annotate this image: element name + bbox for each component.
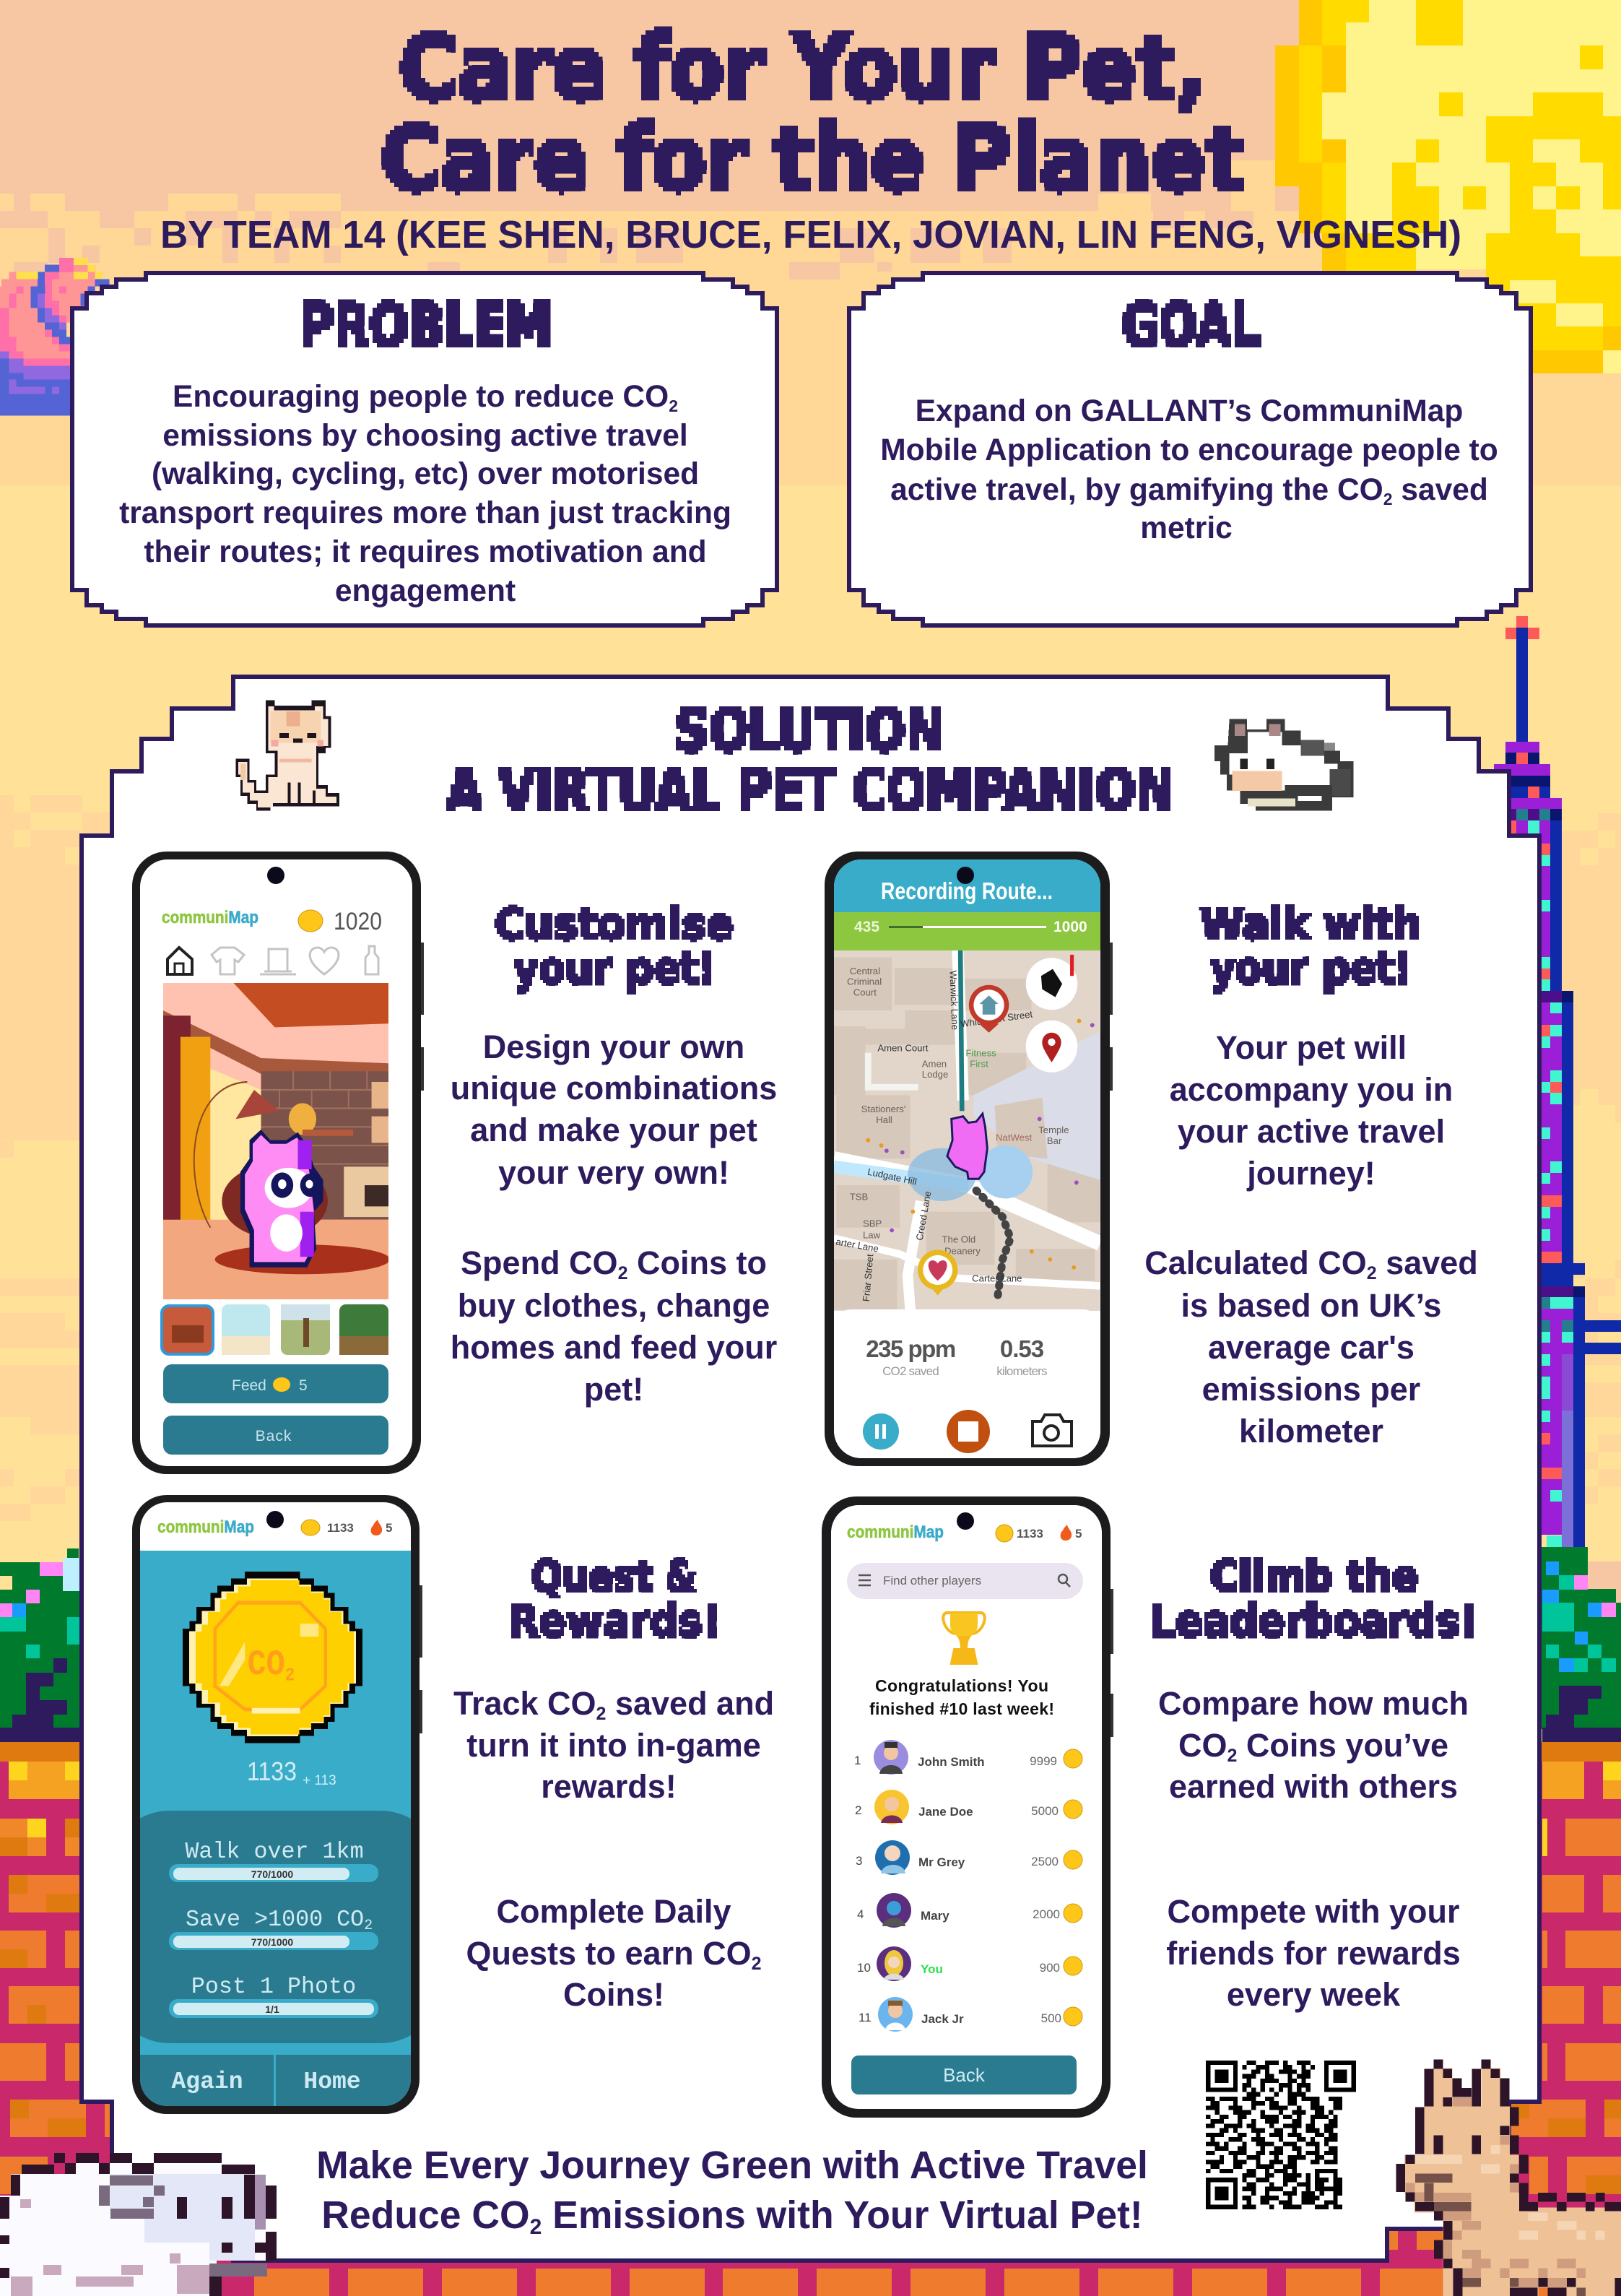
decoration: right hedge [1539,1547,1621,1742]
stats panel: CO2 saved [882,1364,939,1378]
map: Stationers' [861,1104,905,1114]
coin and streak [996,1525,1082,1542]
problem text: engagement [335,574,516,608]
heading: customise: Customise [495,899,734,950]
row 1 [854,1740,1082,1775]
row 1: 1 [854,1754,861,1767]
goal text: Expand on GALLANT’s CommuniMap [916,394,1463,428]
text: quests: 2 [752,1954,761,1974]
coin balance: 1020 [334,908,382,935]
home pin [969,985,1009,1033]
row 3 [856,1840,1082,1875]
problem text [119,380,731,608]
pixel CO2 coin: CO [248,1645,285,1685]
coin total: + 113 [303,1773,336,1788]
back button [163,1416,388,1455]
map: Law [863,1229,881,1240]
stop button [947,1410,990,1453]
sun [1275,0,1621,373]
bottom buttons: Home [303,2068,361,2095]
app bar: recording route: Recording Route... [881,878,1053,904]
progress bar 435/1000: 435 [854,919,879,935]
footer tagline: Make Every Journey Green with Active Travel [316,2144,1148,2187]
quest: photo: Post 1 Photo [191,1974,356,2000]
problem text: (walking, cycling, etc) over motorised [152,457,699,491]
pet [240,1130,323,1268]
quest: walk: Walk over 1km [185,1839,364,1865]
row 2: 2 [855,1803,861,1817]
icon: pixel sheep [0,2153,277,2296]
row 4: Mary [921,1909,949,1923]
back button: Back [256,1428,292,1444]
coin total: 1133 [247,1756,297,1786]
map [834,950,1100,1311]
map: Lodge [922,1069,948,1080]
phone: quests [108,1495,442,2114]
title: Care for the Planet [381,107,1244,212]
map: TSB [850,1192,868,1203]
footer tagline: Emissions with Your Virtual Pet! [542,2194,1143,2237]
text: quests: Complete Daily [496,1893,731,1930]
map: SBP [863,1218,882,1229]
quest panel [108,1811,442,2043]
heading: climb the leaderboards: Climb the [1210,1551,1418,1602]
stats panel [834,1309,1100,1461]
search bar: Find other players [883,1574,981,1587]
quest button [1026,955,1077,1010]
coin and streak: 1133 [327,1521,354,1535]
stats panel: 0.53 [1000,1335,1044,1362]
coin and streak [301,1520,392,1535]
communiMap logo: communiMap [847,1522,944,1542]
text: walk: Your pet will [1216,1029,1407,1066]
map: NatWest [996,1132,1032,1143]
panel: problem [72,273,777,625]
text: leaderboards: friends for rewards [1166,1935,1461,1972]
map: Carter Lane [972,1273,1022,1284]
text: leaderboards: 2 [1227,1746,1237,1766]
text: quests: rewards! [541,1768,677,1805]
decoration: brick ground [0,1742,1621,2296]
footer tagline: Reduce CO [321,2194,530,2237]
phone: route map [825,852,1113,1466]
row 11: 500 [1041,2011,1061,2025]
text: customise: unique combinations [451,1070,777,1106]
app bar: recording route [834,859,1100,912]
pixel CO2 coin [183,1572,362,1743]
heading: goal: GOAL [1122,292,1260,360]
text: quests [453,1685,774,2013]
heading: solution [446,697,1175,824]
location button [1026,1021,1077,1073]
row 2: Jane Doe [918,1805,973,1819]
map: White Hart Street [960,1008,1033,1029]
quest: photo [169,1974,378,2018]
goal text: metric [1140,511,1233,545]
row 4: 4 [857,1907,864,1921]
map: Criminal [847,976,882,987]
problem text: emissions by choosing active travel [162,419,688,453]
icon: pixel cow [1214,719,1353,810]
map: Warwick Lane [948,970,960,1030]
text: quests: turn it into in-game [466,1727,761,1764]
pixel CO2 coin: 2 [285,1665,295,1686]
decoration: left hedge [0,1548,79,1742]
map: Amen Court [877,1042,929,1053]
text: customise: homes and feed your [451,1329,777,1366]
heading: walk with your pet: Walk with [1200,899,1422,950]
map: arter Lane [835,1236,879,1255]
text: customise: pet! [584,1371,643,1408]
map: Fitness [965,1048,996,1059]
goal text: active travel, by gamifying the CO [890,473,1383,507]
goal text: 2 [1383,490,1393,508]
progress bar 435/1000: 1000 [1053,919,1087,935]
tab icons [168,946,378,974]
quest: photo: 1/1 [265,2003,279,2015]
phone: leaderboard [822,1496,1113,2118]
text: customise: your very own! [498,1154,729,1191]
home thumbnails [162,1304,388,1355]
text: quests: Track CO [453,1685,596,1722]
text: walk: accompany you in [1170,1071,1453,1108]
heading: solution: A VIRTUAL PET COMPANION [446,757,1175,824]
icon: pixel cat [235,701,339,810]
panel: solution [82,677,1539,2261]
row 2: 5000 [1031,1804,1059,1818]
goal text: Mobile Application to encourage people to [880,433,1498,467]
text: walk [1144,1029,1478,1450]
heart pin [918,1250,957,1296]
text: walk: average car's [1208,1329,1414,1366]
title [381,16,1244,212]
map: Bar [1047,1135,1062,1146]
problem text: their routes; it requires motivation and [144,535,707,569]
heading: walk with your pet: your pet! [1210,943,1412,994]
row 11: Jack Jr [921,2012,964,2026]
coin and streak: 5 [386,1521,392,1535]
map: First [970,1058,988,1069]
leaderboard rows [854,1740,1082,2032]
text: walk: saved [1377,1244,1478,1281]
text: leaderboards: CO [1178,1727,1227,1764]
quest: save CO2: 2 [364,1918,373,1934]
QR code [1206,2061,1356,2209]
heading: solution: SOLUTION [675,697,944,764]
stats panel: 235 ppm [866,1335,955,1362]
congratulations text: finished #10 last week! [869,1699,1054,1718]
heading: problem: PROBLEM [300,292,552,360]
text: walk: emissions per [1202,1371,1420,1408]
communiMap logo: communiMap [162,908,258,927]
coin balance [298,908,382,935]
text: customise: 2 [618,1263,627,1283]
text: quests: Coins! [563,1976,664,2013]
title: Care for Your Pet, [399,16,1205,121]
feed button: Feed [232,1377,266,1394]
progress bar 435/1000 [834,912,1100,950]
text: quests: Quests to earn CO [466,1935,752,1972]
heading: climb the leaderboards: Leaderboards! [1150,1596,1478,1647]
bottom buttons: Again [171,2068,243,2095]
text: walk: your active travel [1178,1113,1445,1150]
map: Hall [876,1114,892,1125]
row 10: 10 [857,1961,871,1975]
feed button: 5 [299,1377,308,1394]
back button [851,2055,1077,2094]
row 10: You [921,1962,943,1976]
quest: walk [169,1839,378,1882]
map: Deanery [944,1245,981,1256]
pause button [863,1413,899,1450]
heading: customise [495,899,734,994]
text: leaderboards: Compare how much [1158,1685,1469,1722]
quest: walk: 770/1000 [251,1868,293,1880]
map: Temple [1038,1125,1069,1135]
coin and streak: 5 [1075,1527,1082,1541]
heading: quest and rewards: Rewards! [508,1596,721,1647]
text: quests: saved and [606,1685,774,1722]
text: customise: and make your pet [470,1112,757,1148]
team credit subtitle: BY TEAM 14 (KEE SHEN, BRUCE, FELIX, JOVIAN, LIN FENG, VIGNESH) [160,213,1461,256]
quest: save CO2 [169,1907,378,1950]
problem text: 2 [669,397,678,415]
row 11 [859,1997,1082,2032]
problem text: transport requires more than just tracking [119,496,731,530]
communiMap logo: communiMap [157,1517,254,1537]
row 3: 3 [856,1854,862,1868]
goal text [880,394,1498,545]
text: walk: 2 [1367,1263,1377,1283]
map: The Old [942,1234,975,1244]
phone: customise pet [132,852,424,1474]
map: Creed Lane [914,1190,933,1242]
map: Court [853,987,877,997]
row 1: John Smith [918,1755,985,1769]
goal text: saved [1393,473,1488,507]
heading: customise: your pet! [513,943,716,994]
text: customise: Design your own [483,1028,744,1065]
heading: quest and rewards: Quest & [531,1551,697,1602]
text: quests: 2 [596,1704,606,1724]
row 10: 900 [1040,1961,1060,1975]
footer tagline [316,2144,1148,2239]
coin and streak: 1133 [1017,1527,1043,1541]
text: customise: Coins to [627,1244,767,1281]
row 3: 2500 [1031,1855,1059,1868]
map: Central [850,966,880,976]
row 3: Mr Grey [918,1855,965,1869]
problem text: Encouraging people to reduce CO [173,380,669,414]
stats panel: kilometers [996,1364,1047,1378]
icon: trophy [943,1613,985,1663]
room scene with pet [163,983,390,1301]
text: customise [451,1028,777,1408]
text: walk: journey! [1246,1155,1376,1192]
text: customise: buy clothes, change [458,1287,770,1324]
icon: pixel snail decoration [0,258,110,416]
text: leaderboards [1158,1685,1469,2013]
feed button [163,1364,388,1403]
footer tagline: 2 [530,2215,542,2239]
congratulations text: Congratulations! You [875,1676,1048,1695]
heading: climb the leaderboards [1150,1551,1478,1647]
camera button [1033,1415,1072,1446]
coin total [247,1756,336,1788]
row 11: 11 [859,2011,872,2024]
heading: walk with your pet [1200,899,1422,994]
text: leaderboards: earned with others [1169,1768,1458,1805]
row 1: 9999 [1030,1754,1057,1768]
text: leaderboards: Coins you’ve [1237,1727,1448,1764]
row 4: 2000 [1033,1907,1060,1921]
icon: pixel llama [1396,2060,1621,2296]
text: walk: Calculated CO [1144,1244,1367,1281]
panel: goal [849,273,1531,625]
text: walk: is based on UK’s [1181,1287,1441,1324]
map: Ludgate Hill [866,1166,918,1187]
quest: save CO2: 770/1000 [251,1936,293,1948]
text: leaderboards: every week [1227,1976,1401,2013]
map: Friar Street [861,1253,875,1302]
map: Amen [922,1058,947,1069]
row 10 [857,1946,1082,1981]
decoration: pixel tower right side [1494,616,1621,1561]
text: leaderboards: Compete with your [1167,1893,1460,1930]
heading: quest and rewards [508,1551,721,1647]
search bar [847,1563,1083,1599]
congratulations text [869,1676,1054,1718]
quest: save CO2: Save >1000 CO [186,1907,364,1933]
row 4 [857,1893,1082,1928]
pet on map [947,1114,987,1179]
bottom buttons [140,2055,411,2107]
row 2 [855,1790,1082,1824]
text: customise: Spend CO [461,1244,618,1281]
text: walk: kilometer [1239,1413,1383,1450]
back button: Back [943,2064,986,2086]
